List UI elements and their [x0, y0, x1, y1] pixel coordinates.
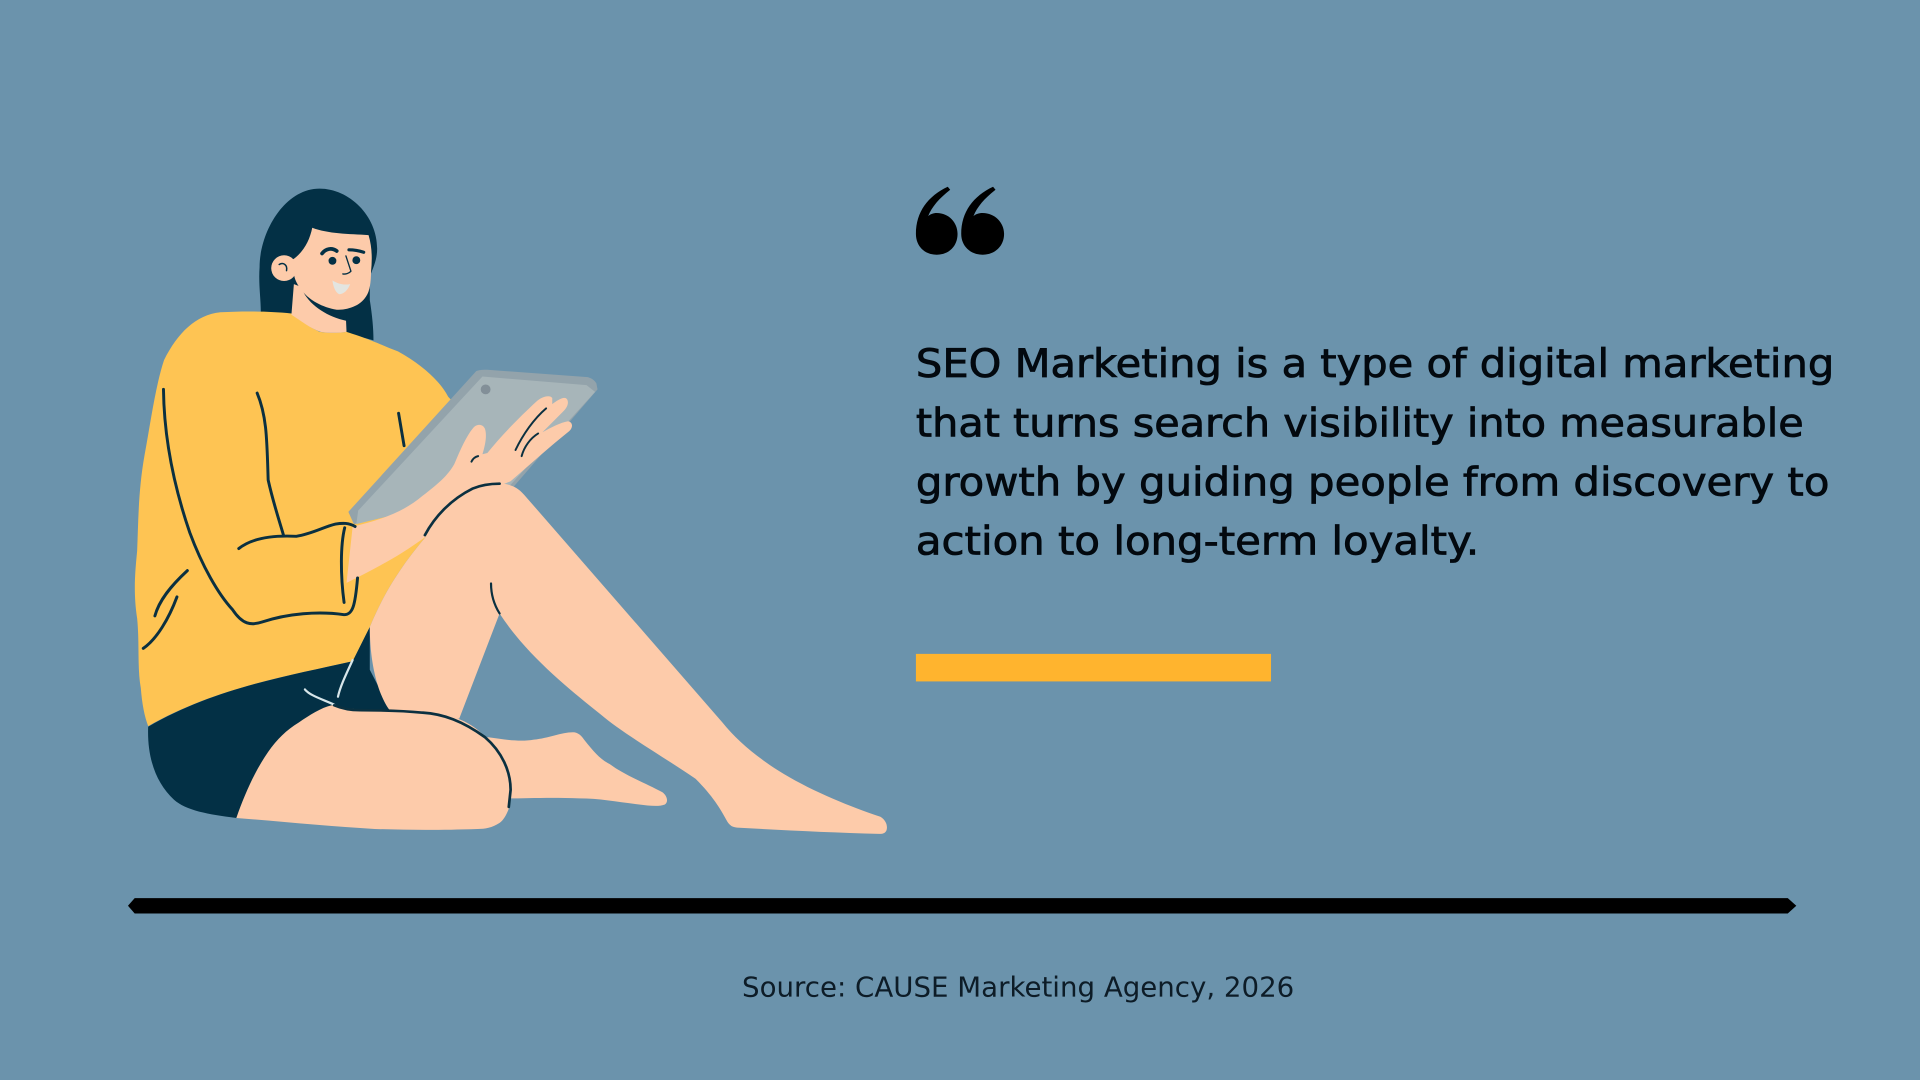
quote text: SEO Marketing is a type of digital marketing [916, 342, 1834, 387]
sleeve and sweater fold lines [143, 389, 404, 648]
facial features [322, 249, 364, 294]
tablet [348, 370, 598, 524]
arm and hand [347, 396, 572, 583]
ear [271, 255, 297, 281]
shorts [148, 627, 392, 818]
finger lines [471, 408, 546, 462]
raised leg [370, 484, 887, 834]
illustration: woman sitting with tablet [135, 189, 887, 834]
quote text [916, 342, 1834, 564]
white short creases [305, 660, 353, 705]
black horizontal divider [128, 898, 1796, 913]
quote text: that turns search visibility into measurable [916, 401, 1804, 446]
sweater [135, 311, 490, 726]
quote text: action to long-term loyalty. [916, 519, 1479, 564]
yellow accent bar [916, 654, 1271, 681]
face [293, 228, 372, 310]
neck [291, 284, 347, 333]
quote text: growth by guiding people from discovery to [916, 460, 1829, 505]
source line: Source: CAUSE Marketing Agency, 2026 [742, 972, 1294, 1004]
knee and leg outlines [334, 484, 511, 807]
hair [259, 189, 377, 340]
front thigh [236, 705, 510, 830]
under-chin hair shadow [304, 293, 347, 321]
quotation mark icon [916, 187, 1004, 255]
lower foot [487, 732, 667, 806]
